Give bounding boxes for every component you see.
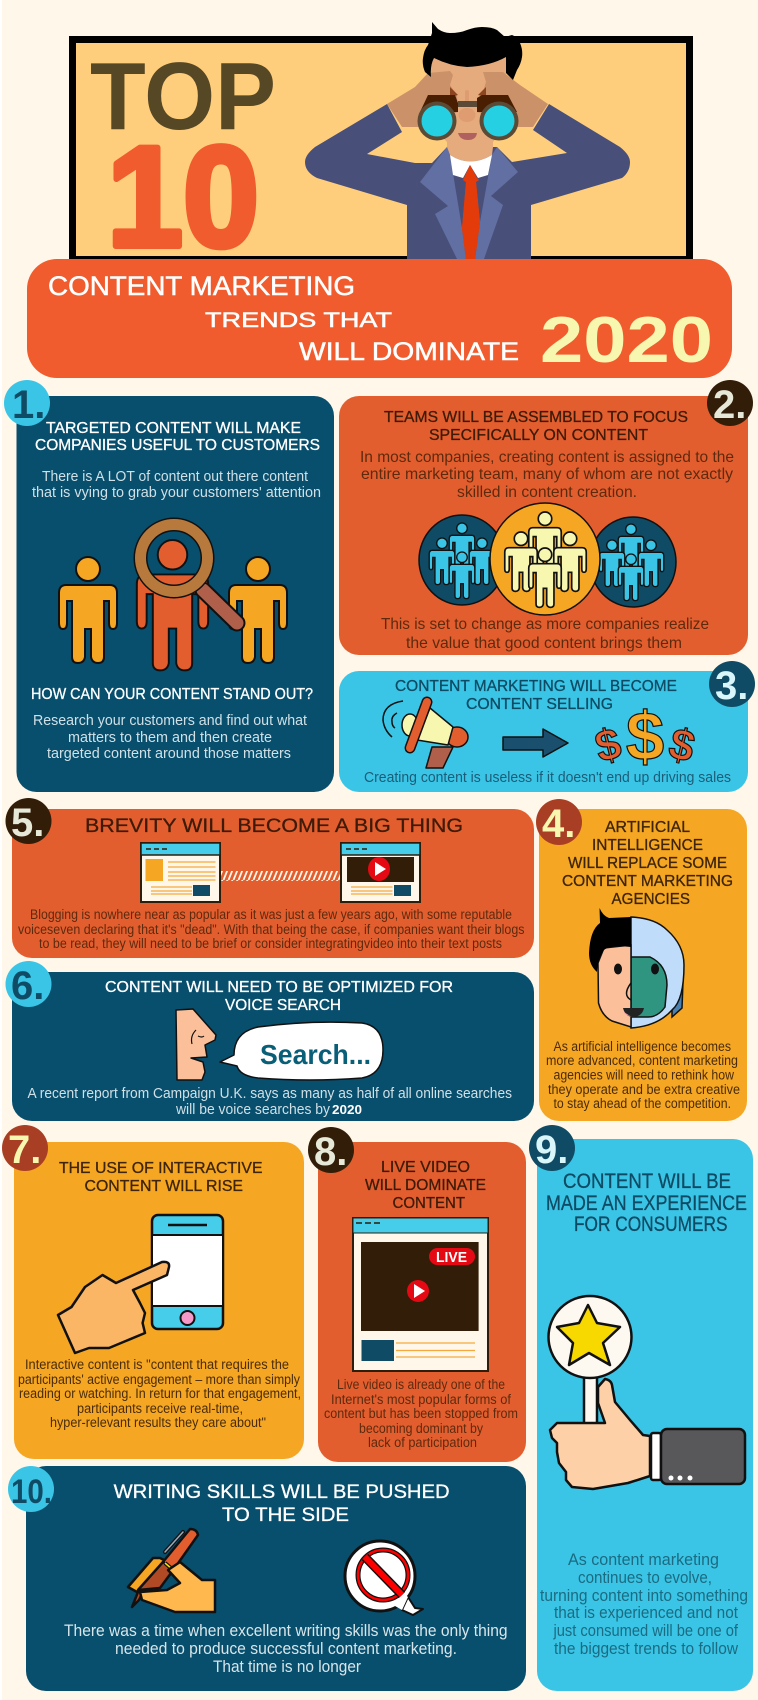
banner heading — [48, 271, 519, 366]
heading 9: CONTENT WILL BE — [563, 1170, 731, 1193]
banner heading: CONTENT MARKETING — [48, 271, 355, 301]
icon: dollar signs: $ — [590, 719, 626, 772]
heading 2: TEAMS WILL BE ASSEMBLED TO FOCUS — [384, 409, 688, 426]
body text 6: will be voice searches by — [175, 1101, 330, 1118]
heading 10: TO THE SIDE — [222, 1504, 349, 1526]
badge 6: 6. — [11, 964, 44, 1008]
intro text 1 — [32, 468, 321, 501]
panel 10: writing skills — [26, 1466, 526, 1691]
heading 5: BREVITY WILL BECOME A BIG THING — [85, 815, 463, 837]
icon: no writing speech symbol — [345, 1541, 423, 1615]
icon: pointing hand — [58, 1262, 169, 1353]
icon: smartphone — [152, 1215, 223, 1329]
panel 1: targeted content — [16, 396, 334, 792]
body text 4: As artificial intelligence becomes — [554, 1039, 731, 1054]
body text 9: continues to evolve, — [578, 1568, 712, 1587]
icon: half human half robot face — [589, 908, 684, 1028]
heading 9 — [546, 1170, 747, 1236]
illustration: businessman with binoculars — [305, 22, 630, 259]
heading 2: SPECIFICALLY ON CONTENT — [429, 427, 649, 444]
body text 10: needed to produce successful content marketing. — [115, 1639, 457, 1658]
badge 7 — [2, 1125, 48, 1172]
body text 9: that is experienced and not — [554, 1603, 738, 1622]
badge 8 — [308, 1127, 354, 1174]
heading 4: INTELLIGENCE — [592, 837, 703, 854]
body text 8: content but has been stopped from — [324, 1406, 518, 1421]
icon: live video page: LIVE — [436, 1249, 467, 1266]
body text 5 — [18, 907, 525, 951]
heading 2 — [384, 409, 688, 444]
body text 7: reading or watching. In return for that engagement, — [19, 1386, 301, 1401]
icon: people with magnifying glass — [59, 524, 287, 670]
badge 3 — [709, 661, 755, 708]
heading 7 — [59, 1160, 262, 1195]
banner heading: WILL DOMINATE — [299, 338, 519, 366]
panel 4: artificial intelligence — [539, 809, 747, 1121]
heading 10 — [114, 1481, 450, 1526]
heading 6: CONTENT WILL NEED TO BE OPTIMIZED FOR — [105, 979, 453, 996]
intro text 2: skilled in content creation. — [457, 484, 637, 501]
body text 5: to be read, they will need to be brief or consider integratingvideo into their text posts — [39, 936, 502, 951]
icon: live video page — [353, 1218, 488, 1371]
body text 8 — [324, 1377, 518, 1450]
panel 2: teams — [339, 396, 748, 655]
body text 10: That time is no longer — [213, 1657, 361, 1676]
icon: arrow — [503, 729, 568, 757]
heading 1: TARGETED CONTENT WILL MAKE — [46, 420, 301, 437]
heading 8: WILL DOMINATE — [365, 1177, 486, 1194]
icon: three teams in circles — [419, 503, 676, 615]
intro text 2: In most companies, creating content is assigned to the — [360, 449, 734, 466]
heading 1 — [35, 420, 320, 454]
body text 8: Internet's most popular forms of — [331, 1392, 511, 1407]
heading 1: COMPANIES USEFUL TO CUSTOMERS — [35, 437, 320, 454]
body text 4: more advanced, content marketing — [546, 1053, 738, 1068]
body text 6: A recent report from Campaign U.K. says as many as half of all online searches — [28, 1085, 512, 1102]
badge 5: 5. — [11, 801, 44, 845]
panel 5: brevity — [12, 809, 534, 958]
badge 7: 7. — [8, 1128, 41, 1172]
closing text 1: Research your customers and find out what — [33, 712, 308, 729]
title: TOP: TOP — [90, 43, 276, 150]
badge 10: 10. — [11, 1473, 52, 1511]
heading 7: CONTENT WILL RISE — [84, 1178, 243, 1195]
intro text 2 — [360, 449, 734, 501]
closing text 1: targeted content around those matters — [47, 745, 291, 762]
heading 4: AGENCIES — [612, 891, 690, 908]
icon: hatched connector — [220, 871, 340, 881]
badge 2 — [707, 380, 753, 427]
intro text 1: that is vying to grab your customers' attention — [32, 484, 321, 501]
heading 4: ARTIFICIAL — [605, 819, 690, 836]
heading 10: WRITING SKILLS WILL BE PUSHED — [114, 1481, 450, 1503]
icon: video page — [341, 843, 420, 902]
panel 3: content selling — [339, 671, 748, 792]
icon: megaphone — [383, 701, 468, 768]
heading 6: VOICE SEARCH — [225, 997, 341, 1014]
badge 6 — [6, 961, 52, 1008]
body text 5: voiceseven declaring that it's "dead". With that being the case, if companies want their blogs — [18, 922, 525, 937]
body text 6 — [28, 1085, 512, 1118]
body text 7: hyper-relevant results they care about" — [50, 1415, 266, 1430]
icon: speech bubble with search: Search... — [260, 1039, 371, 1070]
banner — [27, 259, 732, 378]
badge 5 — [6, 798, 52, 845]
panel 7: interactive content — [14, 1142, 304, 1459]
body text 7: participants' active engagement – more than simply — [18, 1372, 300, 1387]
body text 3: Creating content is useless if it doesn't end up driving sales — [364, 769, 731, 786]
heading 8: CONTENT — [392, 1195, 466, 1212]
closing text 2: the value that good content brings them — [406, 635, 682, 652]
body text 10 — [64, 1621, 508, 1676]
banner year 2020: 2020 — [540, 303, 713, 376]
icon: speech bubble with search — [220, 1022, 383, 1080]
body text 8: becoming dominant by — [359, 1421, 483, 1436]
panel 8: live video — [318, 1142, 526, 1462]
heading 3 — [395, 678, 677, 713]
body text 5: Blogging is nowhere near as popular as it was just a few years ago, with some reputable — [30, 907, 512, 922]
body text 10: There was a time when excellent writing skills was the only thing — [64, 1621, 508, 1640]
heading 4 — [562, 819, 733, 908]
icon: hand writing with pen — [128, 1529, 215, 1612]
closing text 2: This is set to change as more companies realize — [381, 616, 709, 633]
body text 9: As content marketing — [568, 1550, 719, 1569]
heading 3: CONTENT MARKETING WILL BECOME — [395, 678, 677, 695]
panel 9: experience — [537, 1139, 753, 1691]
badge 8: 8. — [314, 1130, 347, 1174]
panel 6: voice search — [12, 972, 534, 1121]
body text 6: 2020 — [332, 1102, 362, 1117]
heading 3: CONTENT SELLING — [466, 696, 613, 713]
badge 1 — [4, 380, 50, 427]
icon: blog page — [141, 843, 220, 902]
badge 3: 3. — [715, 664, 748, 708]
body text 8: lack of participation — [368, 1435, 477, 1450]
title: 10: 10 — [107, 118, 259, 277]
icon: dollar signs — [590, 698, 700, 775]
body text 4: agencies will need to rethink how — [554, 1068, 734, 1082]
body text 9 — [540, 1550, 748, 1658]
heading 7: THE USE OF INTERACTIVE — [59, 1160, 262, 1177]
closing text 2 — [381, 616, 709, 652]
closing text 1: matters to them and then create — [68, 729, 272, 746]
body text 7 — [18, 1357, 301, 1430]
badge 1: 1. — [12, 383, 45, 427]
badge 4: 4. — [542, 802, 575, 846]
badge 2: 2. — [713, 383, 746, 427]
body text 7: participants receive real-time, — [77, 1401, 243, 1416]
intro text 2: entire marketing team, many of whom are not exactly — [361, 466, 733, 483]
badge 4 — [536, 799, 582, 846]
icon: dollar signs: $ — [626, 698, 664, 775]
banner heading: TRENDS THAT — [205, 309, 392, 332]
heading 6 — [105, 979, 453, 1014]
heading 9: FOR CONSUMERS — [574, 1213, 728, 1236]
body text 4: to stay ahead of the competition. — [554, 1096, 731, 1111]
heading 4: WILL REPLACE SOME — [568, 855, 727, 872]
badge 9: 9. — [535, 1128, 568, 1172]
closing text 1 — [33, 712, 308, 762]
intro text 1: There is A LOT of content out there content — [42, 468, 309, 485]
heading 4: CONTENT MARKETING — [562, 873, 733, 890]
icon: thumbs up holding star paddle — [548, 1296, 745, 1489]
heading 8 — [365, 1159, 486, 1212]
body text 8: Live video is already one of the — [337, 1377, 505, 1392]
badge 9 — [529, 1125, 575, 1172]
body text 4: they operate and be extra creative — [548, 1082, 740, 1097]
body text 7: Interactive content is "content that requires the — [25, 1357, 289, 1372]
icon: dollar signs: $ — [664, 719, 700, 772]
icon: face profile — [176, 1009, 216, 1080]
header frame — [72, 40, 690, 260]
body text 9: the biggest trends to follow — [554, 1639, 739, 1658]
heading: how can your content stand out: HOW CAN YOUR CONTENT STAND OUT? — [31, 686, 313, 703]
heading 8: LIVE VIDEO — [381, 1159, 470, 1176]
body text 4 — [546, 1039, 740, 1111]
